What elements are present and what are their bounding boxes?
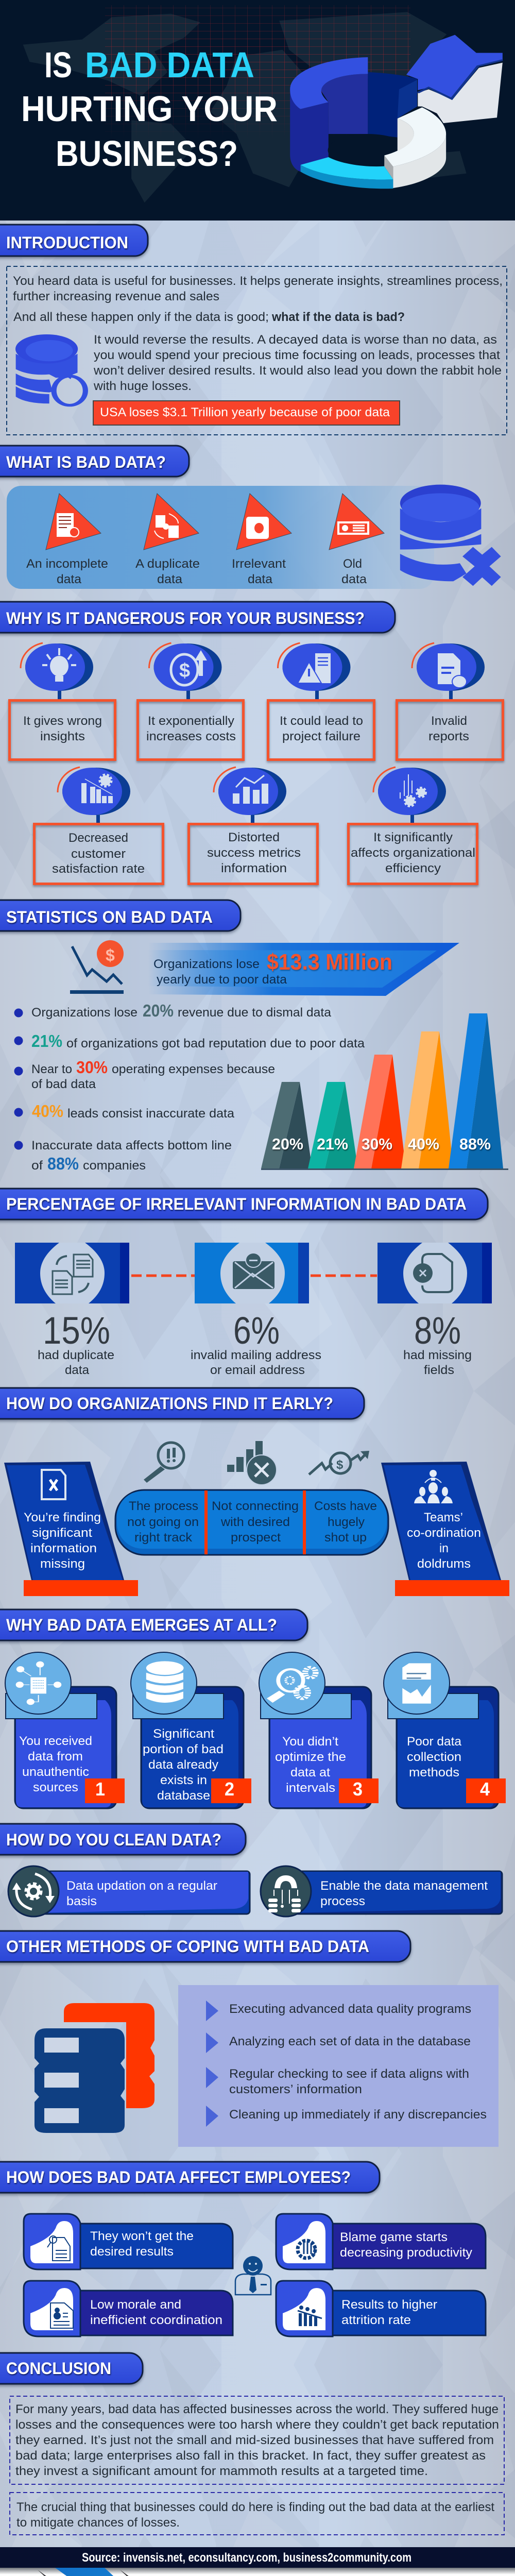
panel: significant information missing: missing — [40, 1557, 85, 1571]
icon: database with refresh arrow — [15, 334, 85, 405]
card: blame game: decreasing productivity — [340, 2246, 472, 2260]
heading: how do you clean data: HOW DO YOU CLEAN DATA? — [6, 1831, 221, 1849]
item: old data — [329, 494, 384, 586]
stat: 88 percent: companies — [83, 1159, 146, 1173]
panel: teams coordination — [381, 1462, 509, 1596]
icon: duplicate documents — [53, 1255, 93, 1294]
banner: 13.3 million: Organizations lose — [153, 957, 260, 971]
danger: distorted metrics — [188, 767, 317, 884]
icon: warning and server — [298, 653, 331, 683]
card 4: poor collection: collection — [407, 1750, 461, 1764]
icon: 3D donut chart with arrow — [290, 35, 503, 189]
card 3: did not optimize: optimize the — [275, 1750, 346, 1764]
stat block: 15 percent duplicate: 15% — [43, 1309, 110, 1352]
stat block: 6 percent invalid mail: 6% — [233, 1309, 280, 1352]
pill: warning signs: The process — [129, 1499, 198, 1513]
danger: project failure — [268, 643, 374, 759]
panel: significant information missing: information — [30, 1541, 97, 1555]
bar: 30 percent: 30% — [362, 1135, 392, 1153]
item: regular checking: customers’ information — [229, 2082, 362, 2096]
danger: invalid reports: reports — [428, 730, 469, 743]
icon: torn document — [402, 1663, 431, 1704]
stat: 40 percent: leads consist inaccurate data — [67, 1107, 235, 1121]
item: cleaning up: Cleaning up immediately if any discrepancies — [229, 2108, 487, 2122]
card 4: poor collection: methods — [409, 1766, 459, 1780]
danger: organizational efficiency: affects organizational — [351, 846, 475, 860]
icon: gears and signal — [400, 774, 425, 806]
number badge 1: 1 — [95, 1778, 105, 1800]
connector dashes — [131, 1275, 377, 1277]
danger: distorted metrics: success metrics — [207, 846, 301, 860]
item: irrelevant data: data — [248, 572, 273, 586]
heading: employees — [0, 2162, 380, 2193]
card 1: unauthentic sources: sources — [33, 1781, 78, 1794]
title: HURTING YOUR — [21, 89, 278, 129]
item: duplicate data: data — [157, 572, 183, 586]
icon: bars with cross — [227, 1441, 277, 1485]
heading: other methods — [0, 1931, 410, 1962]
stat block: 15 percent duplicate: data — [65, 1363, 90, 1377]
card: attrition: attrition rate — [341, 2313, 411, 2327]
bar: 40 percent: 40% — [408, 1135, 439, 1153]
number badge 3 — [339, 1778, 379, 1803]
item: regular checking: Regular checking to see if data aligns with — [229, 2067, 469, 2081]
number badge 2: 2 — [225, 1778, 234, 1800]
panel: teams coordination: in — [439, 1541, 449, 1555]
pill: warning signs: right track — [134, 1531, 193, 1545]
list: statistics — [14, 1001, 365, 1173]
stat: 30 percent: of bad data — [31, 1077, 96, 1091]
stat: 30 percent — [14, 1058, 275, 1091]
icon: document with cross — [438, 653, 467, 688]
item: data management process — [261, 1866, 502, 1917]
title: IS — [44, 45, 72, 85]
panel: conclusion paragraph: losses and the consequences were too harsh where they couldn’t get back reputation — [15, 2418, 499, 2432]
stat: 20 percent — [14, 1001, 332, 1020]
card: desired results: desired results — [90, 2245, 174, 2259]
stat block: 8 percent missing fields: fields — [424, 1363, 454, 1377]
footer — [0, 2568, 515, 2576]
bar: 21 percent: 21% — [317, 1135, 348, 1153]
danger: organizational efficiency: It significantly — [373, 831, 453, 844]
item: cleaning up — [206, 2106, 487, 2127]
stat: 20 percent: Organizations lose — [31, 1006, 138, 1020]
card: desired results — [24, 2214, 233, 2269]
hero banner — [0, 0, 515, 221]
card 3: did not optimize: You didn’t — [282, 1735, 338, 1749]
card: low morale: inefficient coordination — [90, 2313, 222, 2327]
panel: teams coordination: co-ordination — [407, 1526, 481, 1540]
heading: how do organizations find it early: HOW DO ORGANIZATIONS FIND IT EARLY? — [6, 1394, 333, 1413]
stat: 30 percent: operating expenses because — [112, 1062, 275, 1076]
chart: percentage peaks — [261, 1013, 508, 1170]
icon: profile sheet — [50, 2303, 73, 2328]
card: attrition — [276, 2281, 486, 2336]
icon: gear with cycle arrows — [12, 1874, 55, 1909]
callout: USA loss: USA loses $3.1 Trillion yearly because of poor data — [100, 405, 390, 419]
heading: why dangerous: WHY IS IT DANGEROUS FOR YOUR BUSINESS? — [6, 609, 365, 628]
stat: 88 percent: Inaccurate data affects bottom line — [31, 1139, 232, 1153]
stat: 30 percent: Near to — [31, 1062, 72, 1076]
card: attrition: Results to higher — [341, 2298, 437, 2312]
item: regular data updation — [8, 1866, 250, 1917]
pill: warning signs: shot up — [324, 1531, 367, 1545]
text: intro lines: further increasing revenue and sales — [13, 290, 219, 303]
danger: project failure: project failure — [282, 730, 360, 743]
heading: how do organizations find it early — [0, 1388, 364, 1419]
panel: conclusion takeaway — [10, 2493, 504, 2535]
bar: 40 percent — [401, 1031, 453, 1168]
pill: warning signs: not going on — [127, 1515, 199, 1529]
card 2: portion already in database: portion of bad — [143, 1742, 224, 1756]
panel: significant information missing — [4, 1462, 138, 1596]
number badge 2 — [211, 1778, 251, 1803]
banner: 13.3 million — [148, 943, 459, 996]
bar: 88 percent — [449, 1013, 503, 1168]
danger: customer satisfaction — [34, 767, 163, 884]
icon: falling chart with coin: $ — [106, 946, 115, 964]
card 2: portion already in database — [131, 1652, 251, 1808]
danger: wrong insights: insights — [40, 730, 85, 743]
panel: conclusion paragraph: they earned. It’s just not the small and mid-sized businesses that have suffered from — [15, 2433, 494, 2447]
title: BAD DATA — [85, 45, 254, 85]
stat: 30 percent: 30% — [76, 1058, 108, 1077]
text: consequence paragraph: with huge losses. — [93, 379, 192, 393]
panel: conclusion takeaway: to mitigate chances of losses. — [16, 2516, 180, 2530]
source bar — [0, 2547, 515, 2568]
heading: why bad data emerges: WHY BAD DATA EMERGES AT ALL? — [6, 1616, 277, 1634]
stat: 88 percent: 88% — [47, 1154, 79, 1173]
item: old data: Old — [343, 557, 362, 571]
heading: what is bad data: WHAT IS BAD DATA? — [6, 453, 166, 471]
panel: conclusion paragraph: For many years, bad data has affected businesses across the world. They suffered huge — [15, 2402, 499, 2416]
pill: warning signs — [115, 1490, 388, 1555]
bar: 20 percent: 20% — [272, 1135, 303, 1153]
item: incomplete data: An incomplete — [26, 557, 108, 571]
stat block: 6 percent invalid mail — [191, 1243, 321, 1377]
text: consequence paragraph: won’t deliver desired results. It would also lead you down the rabbit hole — [93, 364, 502, 378]
text: consequence paragraph: It would reverse the results. A decayed data is worse than no data, as — [94, 333, 497, 347]
heading: why dangerous — [0, 602, 395, 633]
panel: conclusion paragraph — [10, 2396, 504, 2484]
heading: introduction: INTRODUCTION — [6, 233, 128, 252]
danger: invalid reports — [397, 643, 503, 759]
danger: distorted metrics: information — [221, 861, 287, 875]
card 3: did not optimize: data at — [290, 1766, 330, 1780]
danger: customer satisfaction: Decreased — [68, 831, 128, 845]
icon: falling bars and gear — [81, 775, 113, 803]
panel: conclusion paragraph: bad data; large enterprises also fall in this bracket. In fact, they suffer greatest as — [15, 2449, 486, 2463]
item: data management process: Enable the data management — [320, 1879, 488, 1893]
stat: 40 percent — [14, 1101, 235, 1121]
item: irrelevant data: Irrelevant — [232, 557, 286, 571]
item: incomplete data — [26, 494, 108, 586]
danger: project failure: It could lead to — [280, 714, 363, 728]
item: regular checking — [206, 2067, 469, 2096]
card: low morale — [24, 2281, 233, 2336]
text: intro lines: what if the data is bad? — [271, 310, 405, 324]
item: quality programs: Executing advanced data quality programs — [229, 2002, 471, 2016]
panel: significant information missing: significant — [32, 1526, 92, 1540]
danger: increases costs — [138, 643, 243, 759]
icon: magnifier and gears — [267, 1668, 316, 1703]
stat block: 8 percent missing fields: 8% — [414, 1309, 461, 1352]
text: consequence paragraph — [93, 333, 502, 393]
pill: warning signs: with desired — [220, 1515, 290, 1529]
stat: 88 percent: of — [31, 1159, 43, 1173]
heading: how do you clean data — [0, 1824, 246, 1855]
item: duplicate data: A duplicate — [135, 557, 200, 571]
icon: missing file — [413, 1254, 452, 1292]
panel: significant information missing: You’re finding — [24, 1511, 101, 1524]
heading: introduction — [0, 225, 148, 256]
panel: conclusion paragraph: they invest a significant amount for mammoth results at a targeted time. — [15, 2464, 428, 2478]
pill: warning signs: prospect — [231, 1531, 281, 1545]
heading: percentage of irrelevant information: PERCENTAGE OF IRRELEVANT INFORMATION IN BAD DATA — [6, 1195, 467, 1213]
source bar: Source: invensis.net, econsultancy.com, business2community.com — [82, 2551, 411, 2565]
text: intro lines — [13, 274, 503, 324]
stat block: 15 percent duplicate — [15, 1243, 129, 1377]
stat block: 6 percent invalid mail: or email address — [210, 1363, 305, 1377]
item: incomplete data: data — [57, 572, 82, 586]
card 4: poor collection: Poor data — [407, 1735, 462, 1749]
item: irrelevant data — [232, 494, 291, 586]
title — [21, 45, 278, 174]
stat block: 8 percent missing fields — [377, 1243, 492, 1377]
icon: data sources into file — [16, 1662, 61, 1705]
item: analyzing — [206, 2032, 471, 2053]
heading: statistics — [0, 900, 241, 931]
danger: invalid reports: Invalid — [431, 714, 467, 728]
heading: why bad data emerges — [0, 1609, 307, 1640]
panel: other methods list — [178, 1985, 499, 2147]
icon: database stack — [146, 1661, 184, 1703]
icon: document search — [47, 2236, 70, 2261]
icon: dollar with up arrow — [171, 650, 207, 685]
card 1: unauthentic sources — [5, 1652, 125, 1808]
pill: warning signs: hugely — [328, 1515, 365, 1529]
item: old data: data — [341, 572, 367, 586]
item: quality programs — [206, 2001, 471, 2021]
number badge 1 — [85, 1778, 125, 1803]
stat block: 8 percent missing fields: had missing — [403, 1348, 472, 1362]
panel: conclusion takeaway: The crucial thing that businesses could do here is finding out the bad data at the earliest — [16, 2500, 494, 2514]
number badge 3: 3 — [353, 1778, 363, 1800]
bar: 88 percent: 88% — [459, 1135, 491, 1153]
card 4: poor collection — [384, 1652, 506, 1808]
danger: distorted metrics: Distorted — [228, 831, 280, 844]
panel: teams coordination: doldrums — [417, 1557, 471, 1571]
icon: people leaving — [298, 2306, 322, 2326]
text: intro lines: You heard data is useful for businesses. It helps generate insights, streamlines process, — [13, 274, 503, 288]
card 1: unauthentic sources: data from — [28, 1750, 83, 1764]
heading: conclusion: CONCLUSION — [6, 2359, 111, 2378]
banner: 13.3 million: $13.3 Million — [267, 950, 392, 975]
connector lines — [58, 691, 453, 823]
faint world map — [23, 12, 467, 202]
stat: 20 percent: revenue due to dismal data — [178, 1006, 332, 1020]
pill: warning signs: Costs have — [314, 1499, 377, 1513]
stat block: 15 percent duplicate: had duplicate — [38, 1348, 114, 1362]
heading: conclusion — [0, 2353, 143, 2384]
icon: falling chart with coin — [70, 940, 124, 994]
item: regular data updation: basis — [66, 1894, 97, 1908]
heading: what is bad data — [0, 446, 189, 477]
banner: 13.3 million: yearly due to poor data — [157, 973, 287, 987]
icon: server stack — [35, 2003, 154, 2133]
icon: gear with falling bars — [298, 2241, 315, 2258]
card: desired results: They won’t get the — [90, 2229, 194, 2243]
bar: 21 percent — [308, 1082, 358, 1168]
stat: 88 percent — [14, 1139, 232, 1173]
card 2: portion already in database: data already — [148, 1758, 218, 1772]
panel: what is bad data — [7, 485, 501, 589]
danger: increases costs: increases costs — [146, 730, 236, 743]
pill: warning signs: Not connecting — [212, 1499, 299, 1513]
panel: teams coordination: Teams’ — [424, 1511, 463, 1524]
danger: organizational efficiency — [348, 767, 477, 884]
title: BUSINESS? — [56, 133, 238, 174]
item: data management process: process — [320, 1894, 365, 1908]
card 1: unauthentic sources: unauthentic — [22, 1765, 89, 1779]
callout: USA loss — [93, 401, 400, 425]
stat: 21 percent: of organizations got bad reputation due to poor data — [66, 1037, 365, 1050]
icon: team with idea — [414, 1470, 453, 1503]
icon: database with cross — [400, 485, 501, 586]
icon: rising cost — [309, 1451, 369, 1475]
danger: increases costs: It exponentially — [148, 714, 234, 728]
danger: wrong insights: It gives wrong — [23, 714, 102, 728]
item: analyzing: Analyzing each set of data in the database — [229, 2035, 471, 2048]
stat block: 6 percent invalid mail: invalid mailing address — [191, 1348, 321, 1362]
heading: statistics: STATISTICS ON BAD DATA — [6, 908, 213, 926]
icon: magnifier with exclamation — [144, 1443, 184, 1483]
card 2: portion already in database: exists in — [160, 1773, 207, 1787]
card 3: did not optimize: intervals — [286, 1781, 335, 1795]
card 3: did not optimize — [259, 1652, 379, 1808]
card: low morale: Low morale and — [90, 2298, 181, 2312]
bar: 30 percent — [354, 1055, 406, 1168]
card: blame game: Blame game starts — [340, 2230, 448, 2244]
icon: document with cross — [42, 1470, 65, 1499]
icon: employee — [235, 2256, 271, 2295]
text: intro lines: And all these happen only if the data is good; — [13, 310, 269, 324]
stat: 21 percent: 21% — [31, 1031, 62, 1050]
stat: 20 percent: 20% — [143, 1001, 174, 1020]
icon: rising cost: $ — [336, 1458, 344, 1472]
card 2: portion already in database: database — [157, 1789, 210, 1803]
stat: 40 percent: 40% — [32, 1101, 63, 1121]
icon: dollar with up arrow: $ — [179, 660, 190, 682]
item: duplicate data — [135, 494, 200, 586]
icon: light bulb — [42, 648, 76, 682]
stat: 21 percent — [14, 1031, 365, 1050]
icon: gear and database links — [268, 1875, 301, 1912]
heading: employees: HOW DOES BAD DATA AFFECT EMPLOYEES? — [6, 2168, 351, 2187]
number badge 4: 4 — [480, 1778, 490, 1800]
icon: blocked envelope — [233, 1253, 274, 1289]
bar: 20 percent — [261, 1082, 312, 1168]
icon: line over bars — [233, 775, 268, 804]
heading: percentage of irrelevant information — [0, 1189, 488, 1219]
danger: customer satisfaction: satisfaction rate — [52, 862, 145, 876]
card 1: unauthentic sources: You received — [19, 1734, 92, 1748]
danger: customer satisfaction: customer — [71, 847, 126, 861]
number badge 4 — [466, 1778, 506, 1803]
diagonal stripes — [38, 2568, 515, 2576]
danger: wrong insights — [9, 643, 115, 759]
heading: other methods: OTHER METHODS OF COPING WITH BAD DATA — [6, 1937, 369, 1956]
text: consequence paragraph: you would spend your precious time focussing on leads, processes that — [94, 348, 500, 362]
item: regular data updation: Data updation on a regular — [66, 1879, 217, 1893]
card 2: portion already in database: Significant — [153, 1727, 214, 1741]
card: blame game — [276, 2214, 486, 2269]
panel: introduction — [7, 266, 507, 435]
danger: organizational efficiency: efficiency — [385, 861, 441, 875]
red grid — [105, 5, 410, 139]
